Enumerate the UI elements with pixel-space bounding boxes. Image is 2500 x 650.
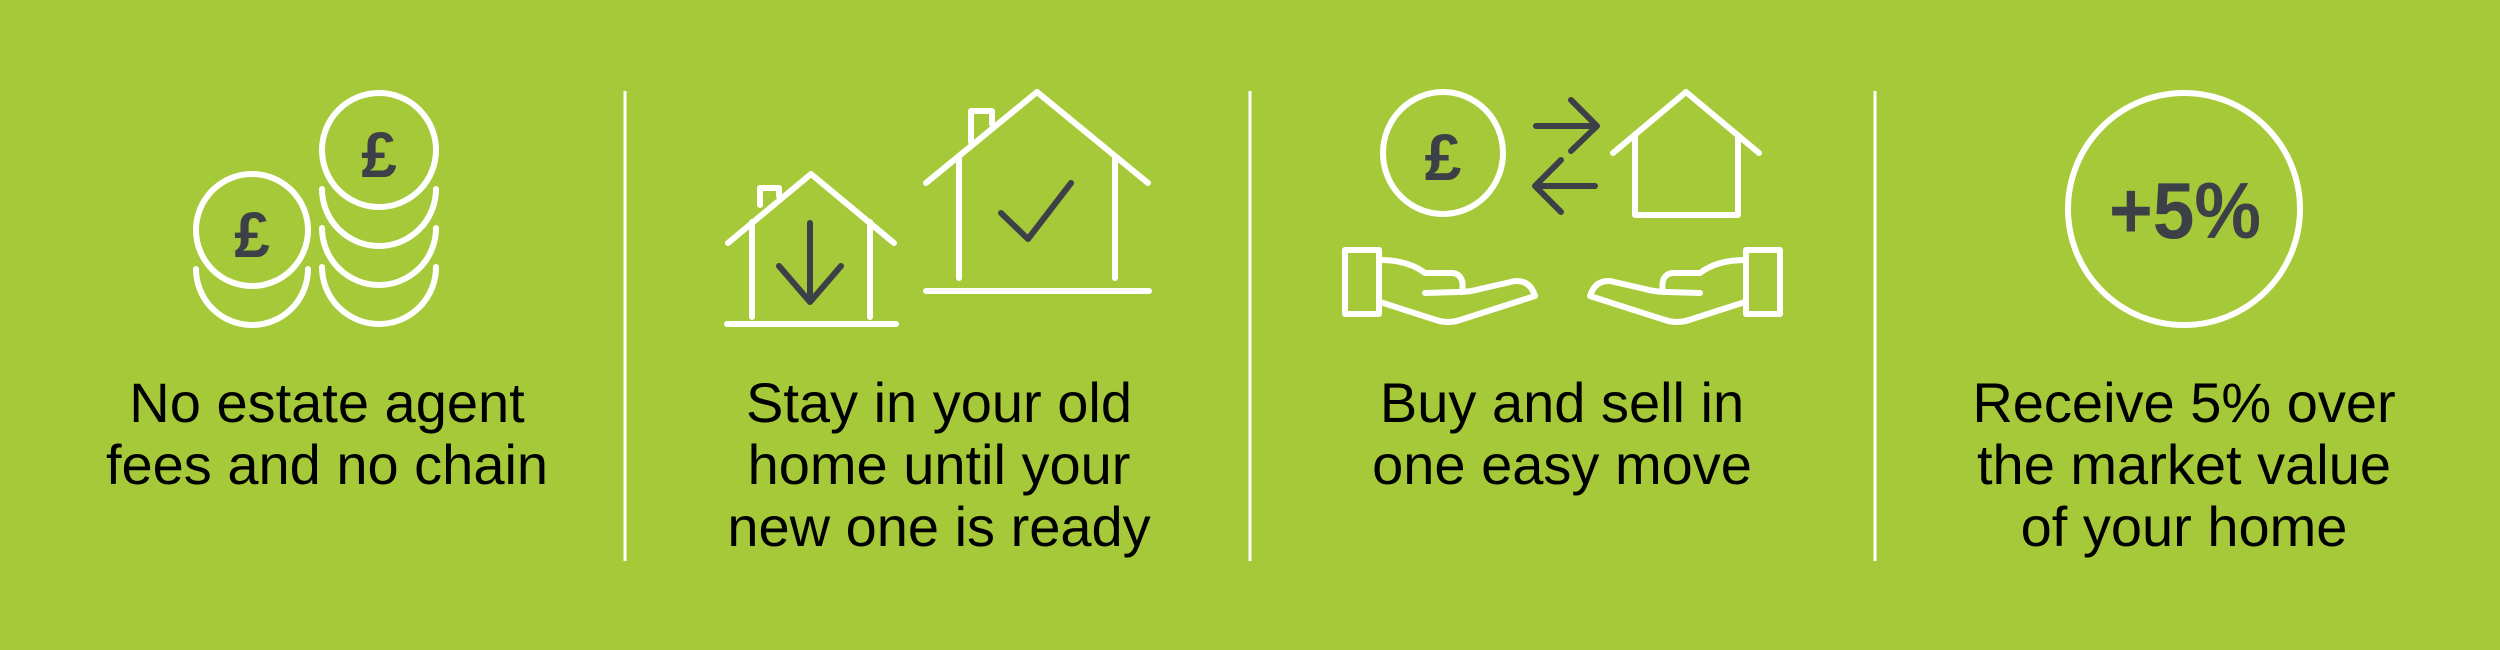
text: stay: new one is ready	[727, 495, 1151, 558]
icon: coin stacks: £	[234, 199, 270, 271]
text: no fees: No estate agent	[129, 371, 525, 434]
icon: giving hand left	[1345, 250, 1535, 322]
text: receive 5%: of your home	[2021, 495, 2347, 558]
panel: +5%	[1972, 93, 2396, 558]
icon: house	[1613, 92, 1759, 215]
text: buy and sell: one easy move	[1372, 433, 1752, 496]
text: receive 5%: the market value	[1977, 433, 2391, 496]
text: stay: Stay in your old	[746, 371, 1132, 434]
text: buy and sell: Buy and sell in	[1380, 371, 1744, 434]
panel: buy and sell	[1345, 92, 1780, 496]
icon: +5% circle: +5%	[2109, 166, 2261, 255]
text: no fees: fees and no chain	[106, 433, 548, 496]
icon: giving hand right	[1590, 250, 1780, 322]
icon: coin stacks	[196, 93, 436, 325]
text: stay: home until your	[748, 433, 1130, 496]
icon: big house with check	[926, 92, 1149, 291]
icon: small house with down arrow	[727, 174, 896, 324]
panel: stay in old home	[727, 92, 1151, 558]
icon: coin stacks: £	[361, 119, 397, 191]
icon: +5% circle	[2068, 93, 2300, 325]
icon: pound coin	[1383, 92, 1503, 214]
icon: exchange arrows	[1535, 100, 1597, 212]
icon: pound coin: £	[1425, 120, 1462, 194]
panel: no fees	[106, 93, 548, 496]
text: receive 5%: Receive 5% over	[1972, 371, 2396, 434]
